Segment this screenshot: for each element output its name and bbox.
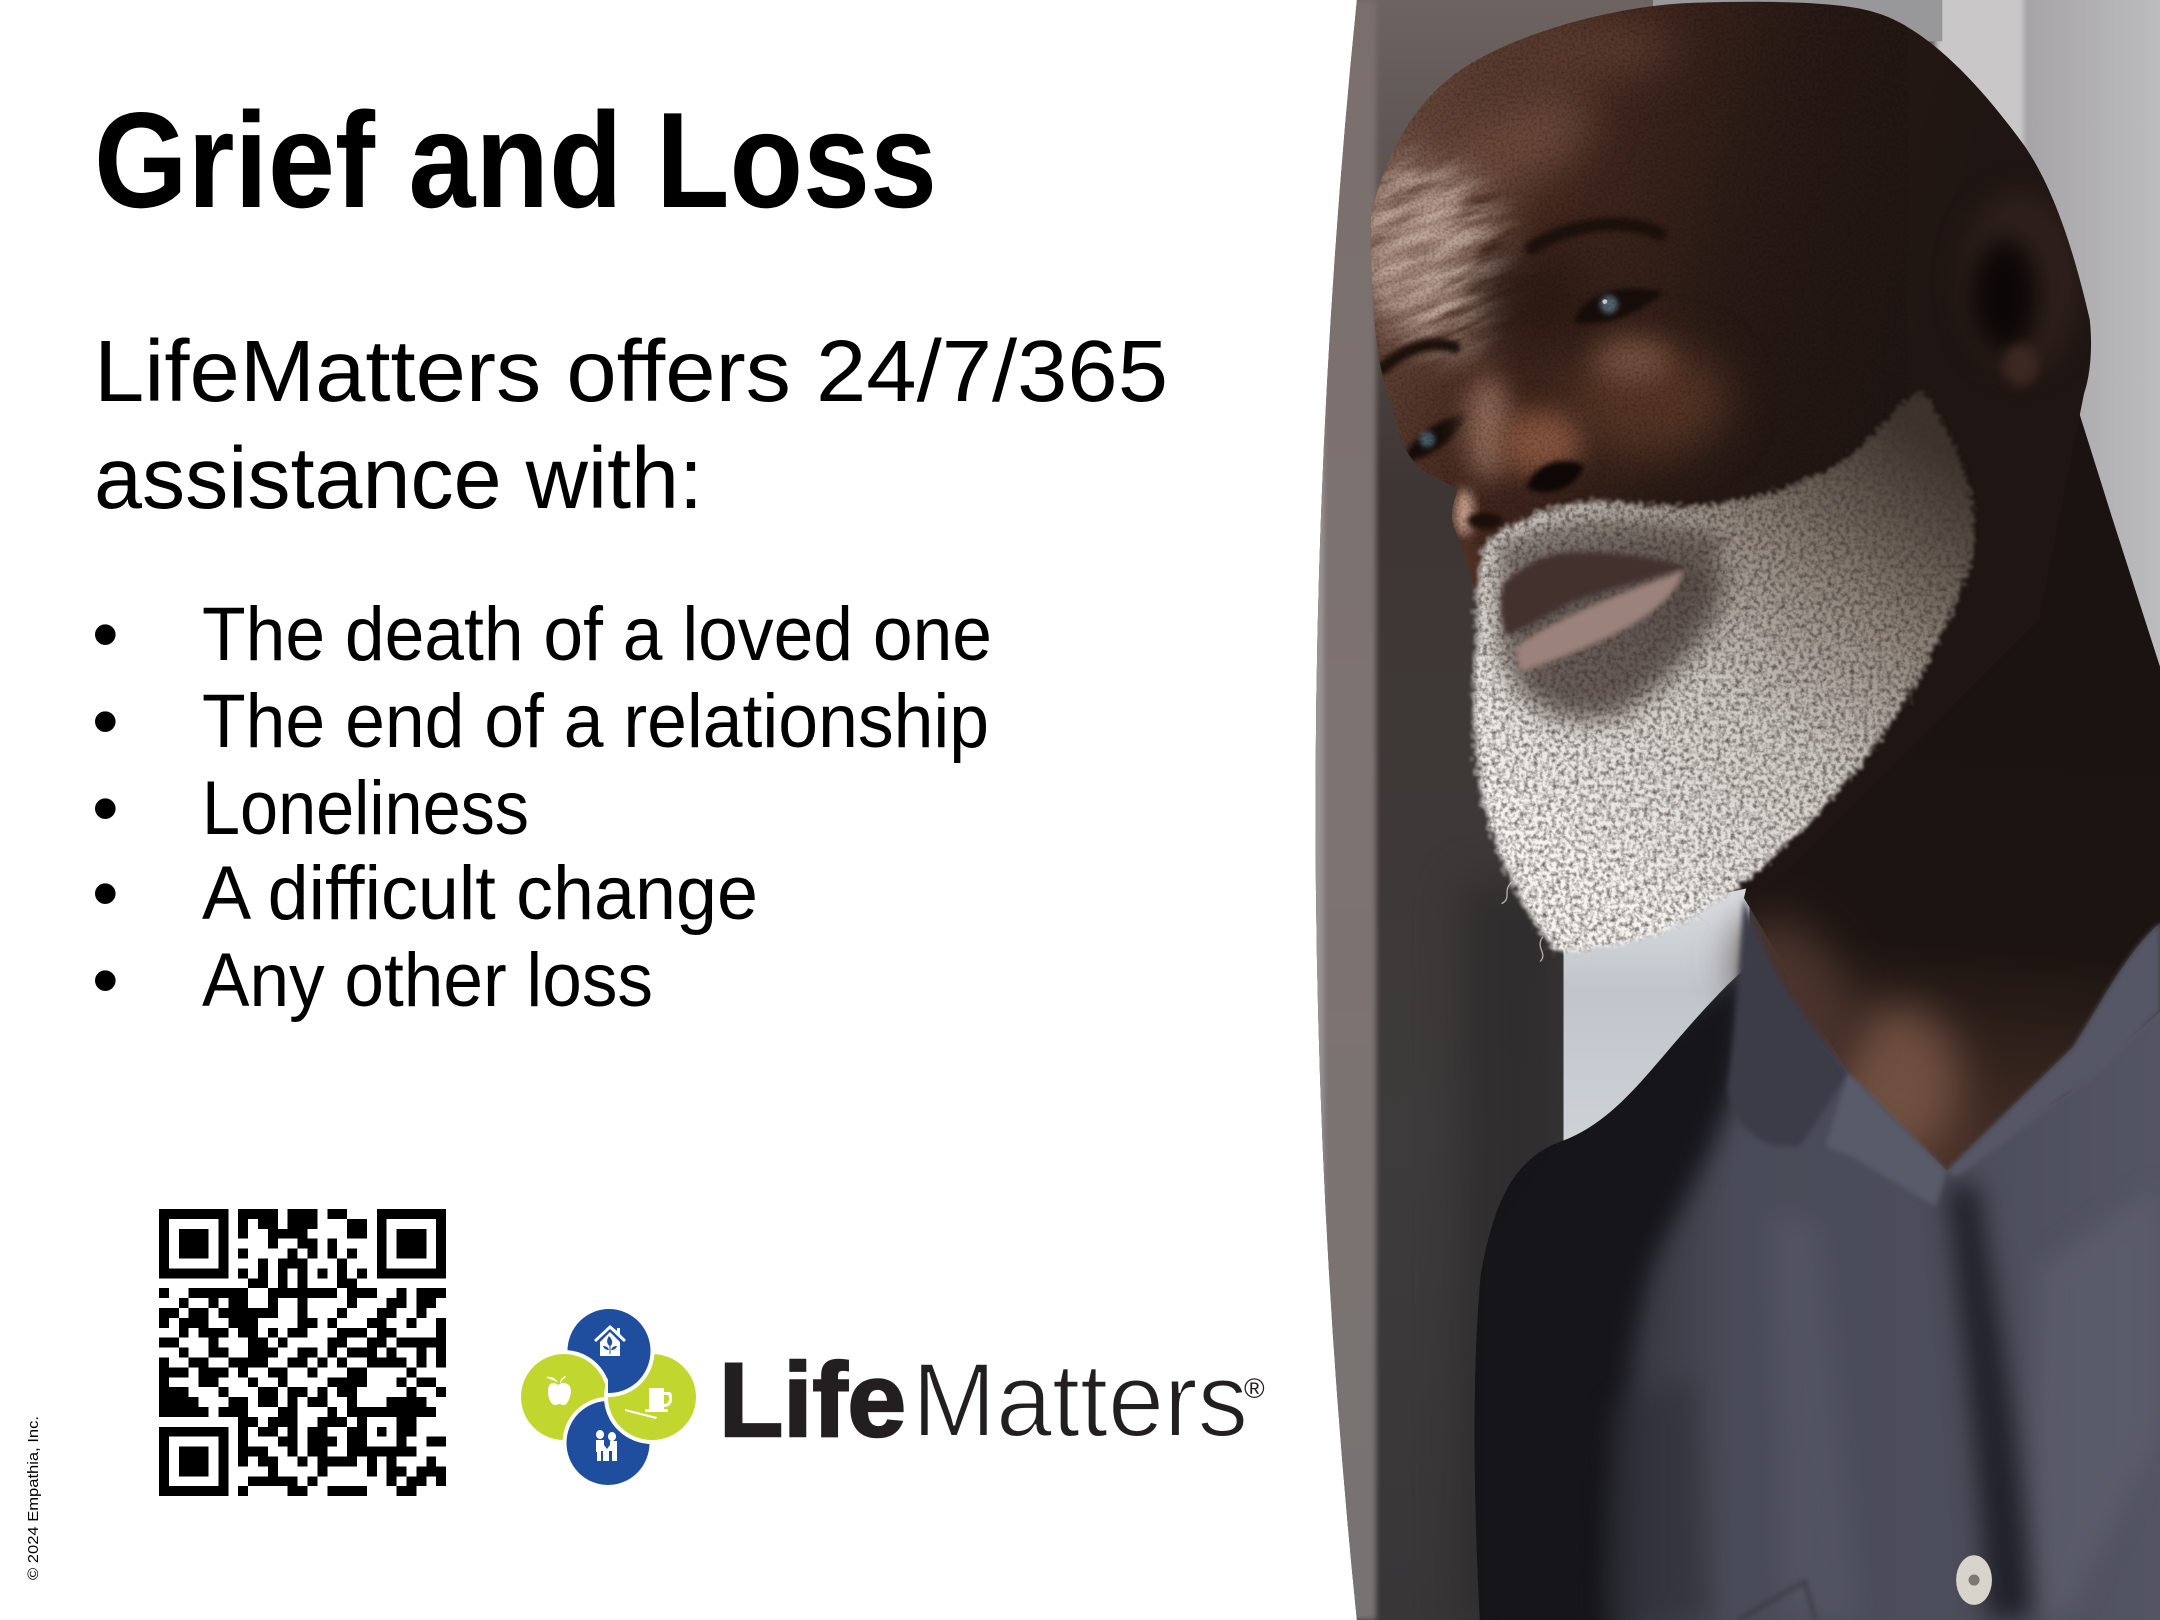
face shading and features clipped to the head (1329, 0, 2080, 620)
beard shadow near mouth (1502, 547, 1722, 720)
list item: loneliness: Loneliness (202, 766, 529, 851)
shirt pocket (1738, 1581, 1816, 1620)
brows (1382, 224, 1660, 369)
title: Grief and Loss (94, 84, 937, 236)
cheek highlight near eye (1594, 339, 1671, 383)
intro text: assistance with: (94, 430, 703, 527)
copyright note: © 2024 Empathia, Inc. (25, 1416, 42, 1580)
logo wordmark: Life (719, 1342, 906, 1459)
right eye (1573, 288, 1664, 324)
list item: loneliness: • (92, 766, 119, 851)
moustache shading (1495, 520, 1729, 572)
beard (1473, 393, 1974, 951)
neck (1744, 372, 2160, 1171)
photo: older man looking out of a window (1295, 0, 2160, 1620)
loose curls at chin (1502, 882, 1709, 962)
icon: people (596, 1430, 617, 1461)
mouth (1501, 552, 1686, 672)
list item: loneliness (92, 766, 529, 851)
logo wordmark: Matters (912, 1342, 1248, 1459)
soft forehead glow (1366, 177, 1472, 333)
list item: any other loss: Any other loss (202, 938, 653, 1023)
shirt button (1956, 1555, 1992, 1605)
list item: end of a relationship: • (92, 679, 119, 764)
forehead highlight (1370, 138, 1524, 375)
lower lip (1515, 570, 1683, 672)
QR code (159, 1209, 446, 1496)
button hole (1969, 1575, 1980, 1586)
neck highlight (1836, 1006, 1960, 1157)
collar band (1825, 1073, 1946, 1207)
left collar (1727, 898, 1849, 1146)
dark shoulder (1564, 974, 1740, 1530)
list item: death of a loved one: The death of a loved one (202, 592, 992, 677)
right collar (1946, 923, 2160, 1176)
list item: difficult change: A difficult change (202, 851, 758, 936)
neck shading on the left (1708, 892, 1862, 1054)
icon: coffee mug (625, 1388, 672, 1419)
logo wordmark (719, 1342, 1265, 1459)
shirt fold highlights (1650, 1229, 2136, 1616)
eye glint (1602, 299, 1607, 304)
icon: apple (546, 1376, 571, 1405)
upper lip (1501, 552, 1686, 636)
logo wordmark: ® (1244, 1373, 1265, 1404)
list item: difficult change: • (92, 851, 119, 936)
crown and cheek tones (1422, 21, 1729, 620)
photo background: wall and window frame (1295, 0, 2160, 1620)
logo mark: four interlocking ellipses (519, 1307, 698, 1487)
list item: any other loss: • (92, 938, 119, 1023)
LifeMatters logo (519, 1307, 1265, 1487)
eye socket shadow (1474, 245, 1598, 361)
list item: end of a relationship: The end of a relationship (202, 679, 989, 764)
skin grain (1370, 3, 1845, 544)
icon: house (594, 1325, 626, 1356)
nose (1455, 375, 1584, 536)
bullet list (92, 592, 992, 1023)
ear (1959, 191, 2080, 386)
intro text: LifeMatters offers 24/7/365 (94, 323, 1168, 420)
left eye (1402, 413, 1468, 463)
intro text (94, 323, 1168, 527)
list item: death of a loved one: • (92, 592, 119, 677)
head (1329, 0, 2091, 909)
shirt (1460, 898, 2160, 1620)
shirt placket shadow (1946, 1185, 2033, 1620)
